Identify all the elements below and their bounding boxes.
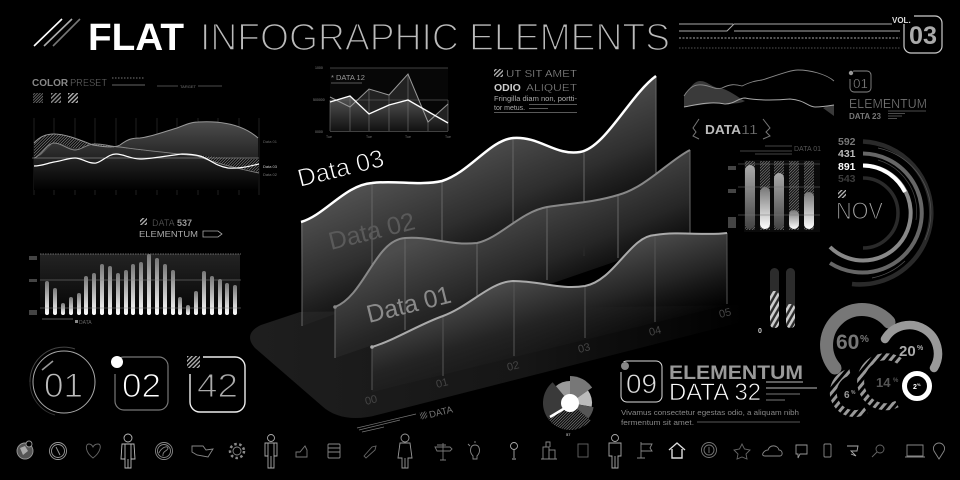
icon: phone bbox=[824, 444, 831, 457]
ring values: 543 bbox=[838, 173, 856, 185]
pie chart bbox=[543, 376, 594, 437]
axis labels: 03 bbox=[577, 341, 592, 356]
line: data 02 bbox=[335, 150, 690, 307]
text block: ut sit amet: ALIQUET bbox=[526, 82, 578, 94]
heading: data537: ELEMENTUM bbox=[139, 230, 198, 239]
panel: color preset: TARGET bbox=[180, 84, 196, 89]
header rule lines bbox=[679, 24, 900, 48]
ring: 2%: % bbox=[917, 382, 921, 387]
badge: 01 bbox=[30, 347, 95, 415]
line: data 03 bbox=[301, 76, 656, 222]
chart: data 12: * DATA 12 bbox=[331, 73, 365, 82]
heading: data11: DATA bbox=[705, 122, 742, 137]
icon: cloud bbox=[763, 446, 782, 456]
badge: 01 elementum data 23 bbox=[847, 70, 927, 121]
icon: gear bbox=[230, 444, 244, 458]
badge: 01 elementum data 23: 01 bbox=[853, 76, 868, 91]
heading: data537: 537 bbox=[177, 218, 192, 228]
icon: signpost bbox=[435, 443, 452, 460]
bar backgrounds bbox=[745, 161, 814, 230]
ring: 60%: 60 bbox=[836, 331, 859, 354]
donut chart: percentages bbox=[827, 310, 938, 414]
ring values: 592 bbox=[838, 136, 856, 148]
bar chart bbox=[29, 254, 241, 326]
chart: mini area bbox=[684, 70, 834, 116]
icon: building bbox=[541, 442, 557, 459]
icon: bulb bbox=[468, 441, 479, 459]
ring: 891 bbox=[830, 165, 911, 260]
icon: title slashes bbox=[34, 19, 80, 46]
icon: globe bbox=[156, 442, 172, 460]
bar chart: DATA bbox=[79, 320, 92, 326]
axis labels bbox=[364, 306, 733, 408]
icon: star bbox=[734, 444, 750, 459]
icon: hand bbox=[296, 446, 307, 457]
chart: data 12: Tue bbox=[326, 135, 332, 139]
axis note: data: DATA bbox=[428, 404, 455, 421]
heading: elementum: ELEMENTUM bbox=[669, 363, 803, 384]
chart: data 12: 0000 bbox=[315, 130, 323, 134]
icon: monitor bbox=[905, 445, 925, 457]
text block: ut sit amet: tor metus. bbox=[494, 105, 525, 112]
icon: rocket bbox=[364, 446, 376, 458]
ring: 6% bbox=[833, 372, 866, 414]
ring: 431 bbox=[830, 154, 922, 272]
icon: usa map bbox=[192, 446, 213, 457]
icon: heart bbox=[86, 444, 100, 458]
area: data 02 bbox=[335, 150, 690, 358]
ring values: 891 bbox=[838, 161, 856, 173]
badge: vol 03: 03 bbox=[909, 22, 937, 50]
icon: man bbox=[265, 434, 277, 468]
vertical gauges: 0 bbox=[758, 328, 762, 335]
small bar chart bbox=[728, 146, 821, 232]
heading: data11 bbox=[693, 119, 770, 139]
bars bbox=[745, 165, 814, 229]
vertical gauges bbox=[758, 268, 795, 335]
panel: color preset: PRESET bbox=[70, 78, 107, 89]
ring: 20% bbox=[885, 325, 938, 368]
ring: 6%: 6 bbox=[844, 390, 850, 401]
icon: search bbox=[872, 445, 884, 457]
ring: 592 bbox=[852, 142, 931, 284]
icon: flag bbox=[637, 442, 652, 458]
icon: man bbox=[609, 434, 621, 468]
text block: ut sit amet: ODIO bbox=[494, 82, 521, 94]
panel: color preset: COLOR bbox=[32, 78, 69, 89]
main 3d chart bbox=[295, 76, 733, 408]
icon: house bbox=[669, 443, 685, 458]
icon: woman bbox=[121, 434, 135, 468]
block: 09 elementum data 32 bbox=[617, 361, 817, 427]
area: hatched band bbox=[34, 134, 259, 172]
ring: 6%: % bbox=[851, 390, 856, 396]
chart: area lines bbox=[32, 118, 278, 195]
ring: 20%: % bbox=[917, 345, 924, 352]
icon: woman bbox=[398, 434, 412, 468]
icon: shop bbox=[328, 444, 340, 458]
radial chart: nov bbox=[830, 136, 931, 284]
block: 09 elementum data 32: fermentum sit amet. bbox=[621, 418, 694, 427]
ring values bbox=[838, 136, 856, 185]
badge: 42: 42 bbox=[197, 367, 238, 404]
line: data 01 bbox=[372, 233, 727, 347]
icon: chat bbox=[796, 445, 807, 458]
icon: compass bbox=[50, 442, 66, 460]
label: data 03: Data 03 bbox=[295, 144, 387, 193]
icon: megaphone bbox=[847, 446, 858, 456]
text block: ut sit amet bbox=[494, 68, 578, 112]
axis labels: 01 bbox=[435, 376, 450, 391]
chart: data 12: Tue bbox=[445, 135, 451, 139]
ring: 20%: 20 bbox=[899, 343, 916, 360]
chart: data 12: Tue bbox=[366, 135, 372, 139]
badge: 42 bbox=[184, 352, 245, 412]
ring: 2% bbox=[904, 374, 930, 398]
area: data 01 bbox=[34, 122, 258, 190]
ring: 14%: 14 bbox=[876, 375, 891, 390]
label: data 02: Data 02 bbox=[326, 207, 418, 256]
chart: area lines: Data 01 bbox=[263, 139, 278, 144]
label: data 01: Data 01 bbox=[364, 281, 454, 329]
paragraph: Vivamus consectetur egestas odio, a aliquam nibh bbox=[621, 408, 799, 417]
badge: vol 03: VOL. bbox=[892, 16, 911, 25]
badge: 09: 09 bbox=[626, 369, 657, 399]
lines bbox=[766, 382, 817, 388]
ring values: 431 bbox=[838, 148, 856, 160]
badge: 01: 01 bbox=[44, 367, 83, 405]
ring: 14%: % bbox=[893, 378, 899, 384]
small bar chart: DATA 01 bbox=[794, 146, 821, 153]
axis labels: 00 bbox=[364, 393, 379, 408]
heading: data537: DATA bbox=[152, 218, 175, 228]
badge: 02: 02 bbox=[122, 367, 161, 404]
axis labels: 02 bbox=[506, 359, 521, 374]
icon row bbox=[17, 434, 945, 468]
bars bbox=[45, 254, 237, 315]
chart: area lines: Data 02 bbox=[263, 172, 278, 177]
heading: data 32: DATA 32 bbox=[669, 379, 761, 406]
line: data 03 bbox=[34, 154, 259, 168]
chart: data 12 bbox=[313, 66, 451, 139]
chart: data 12: 1000 bbox=[315, 66, 323, 70]
chart: area lines: Data 03 bbox=[263, 164, 278, 169]
title bbox=[34, 17, 670, 59]
panel: color preset bbox=[32, 78, 222, 103]
title: infographic elements: INFOGRAPHIC ELEMENTS bbox=[200, 17, 670, 59]
axis note: data bbox=[357, 404, 455, 432]
area: data 01 bbox=[372, 233, 727, 392]
heading: data537 bbox=[139, 218, 222, 239]
chart: data 12: 500000 bbox=[313, 98, 325, 102]
badge: 01 elementum data 23: ELEMENTUM bbox=[849, 97, 927, 111]
icon: tablet bbox=[578, 444, 588, 457]
ring: 60%: % bbox=[860, 334, 869, 345]
month label: NOV bbox=[836, 198, 883, 225]
axis labels: 05 bbox=[718, 306, 733, 321]
icon: globe pin bbox=[17, 441, 33, 459]
heading: data11: 11 bbox=[741, 122, 758, 137]
text block: ut sit amet: UT SIT AMET bbox=[506, 68, 578, 80]
ring: 543 bbox=[863, 178, 898, 248]
icon: dollar bbox=[702, 442, 716, 458]
text block: ut sit amet: Fringilla diam non, portti- bbox=[494, 96, 578, 103]
ring: 2%: 2 bbox=[913, 384, 917, 391]
badge: 01 elementum data 23: DATA 23 bbox=[849, 112, 882, 121]
axis labels: 04 bbox=[648, 324, 663, 339]
title: flat: FLAT bbox=[88, 17, 184, 59]
badge: 02 bbox=[110, 356, 168, 410]
platform bbox=[250, 305, 745, 418]
ring: 60% bbox=[827, 310, 889, 368]
badge: 09 bbox=[617, 361, 662, 402]
icon: key pin bbox=[510, 442, 518, 459]
chart: data 12: Tue bbox=[405, 135, 411, 139]
area: data 03 bbox=[301, 76, 656, 326]
icon: map pin bbox=[933, 443, 945, 459]
ring: 14% bbox=[861, 357, 901, 407]
badge: vol 03 bbox=[892, 12, 942, 53]
pie chart: 57 bbox=[566, 432, 571, 437]
